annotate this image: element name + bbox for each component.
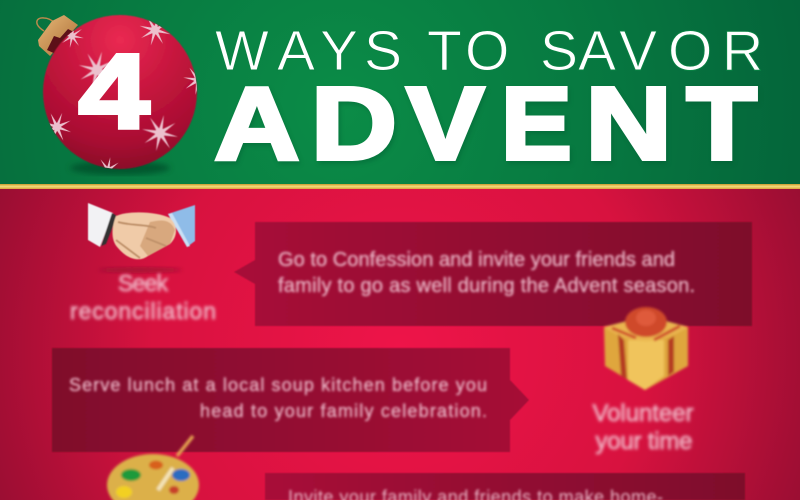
title line: Advent [214,66,758,185]
callout box [52,348,529,452]
background: red body [0,188,800,500]
Advent letters: A [214,67,299,181]
ornament ball [43,15,197,169]
ornament snowflakes [50,20,197,168]
title line: Ways to savor: WAYS TO SAVOR [215,19,763,83]
callout text: Go to Confession and invite your friends and [278,249,675,271]
icon: paint palette [107,436,199,500]
Advent letters: D [311,66,397,181]
Advent shadow: E [503,69,574,185]
label: reconciliation [70,298,216,324]
ornament with number 4 [36,14,198,176]
Advent shadow: N [587,69,673,184]
label: Seek [118,270,168,296]
label: Volunteer [592,400,694,427]
Advent shadow: T [688,70,758,185]
Advent letters: T [686,67,757,182]
Advent letters [214,66,757,182]
label [592,400,694,455]
callout box [265,473,745,500]
Advent shadow [216,69,758,185]
ornament shadow [70,161,170,175]
panel: seek reconciliation [70,203,752,326]
Advent letters: E [501,66,572,182]
Advent letters: N [586,66,672,181]
callout text: family to go as well during the Advent season. [278,275,695,297]
panel: volunteer your time [52,307,694,455]
icon: handshake [88,203,195,273]
Advent letters: V [406,67,484,181]
callout text [69,375,487,421]
callout text: Serve lunch at a local soup kitchen before you [69,375,487,395]
Advent shadow: D [313,69,399,184]
ornament hook [37,18,54,31]
label: your time [596,428,692,455]
callout box [234,222,752,326]
callout text: head to your family celebration. [200,401,487,421]
panel: creative activity [107,436,745,500]
Advent shadow: A [216,70,301,184]
ornament cap [38,15,78,56]
callout text [278,249,695,297]
header band [0,0,800,184]
icon: gift box [604,307,688,390]
label [70,270,216,324]
Advent shadow: V [408,70,486,184]
numeral 4: 4 [79,32,149,151]
gold divider [0,184,800,189]
